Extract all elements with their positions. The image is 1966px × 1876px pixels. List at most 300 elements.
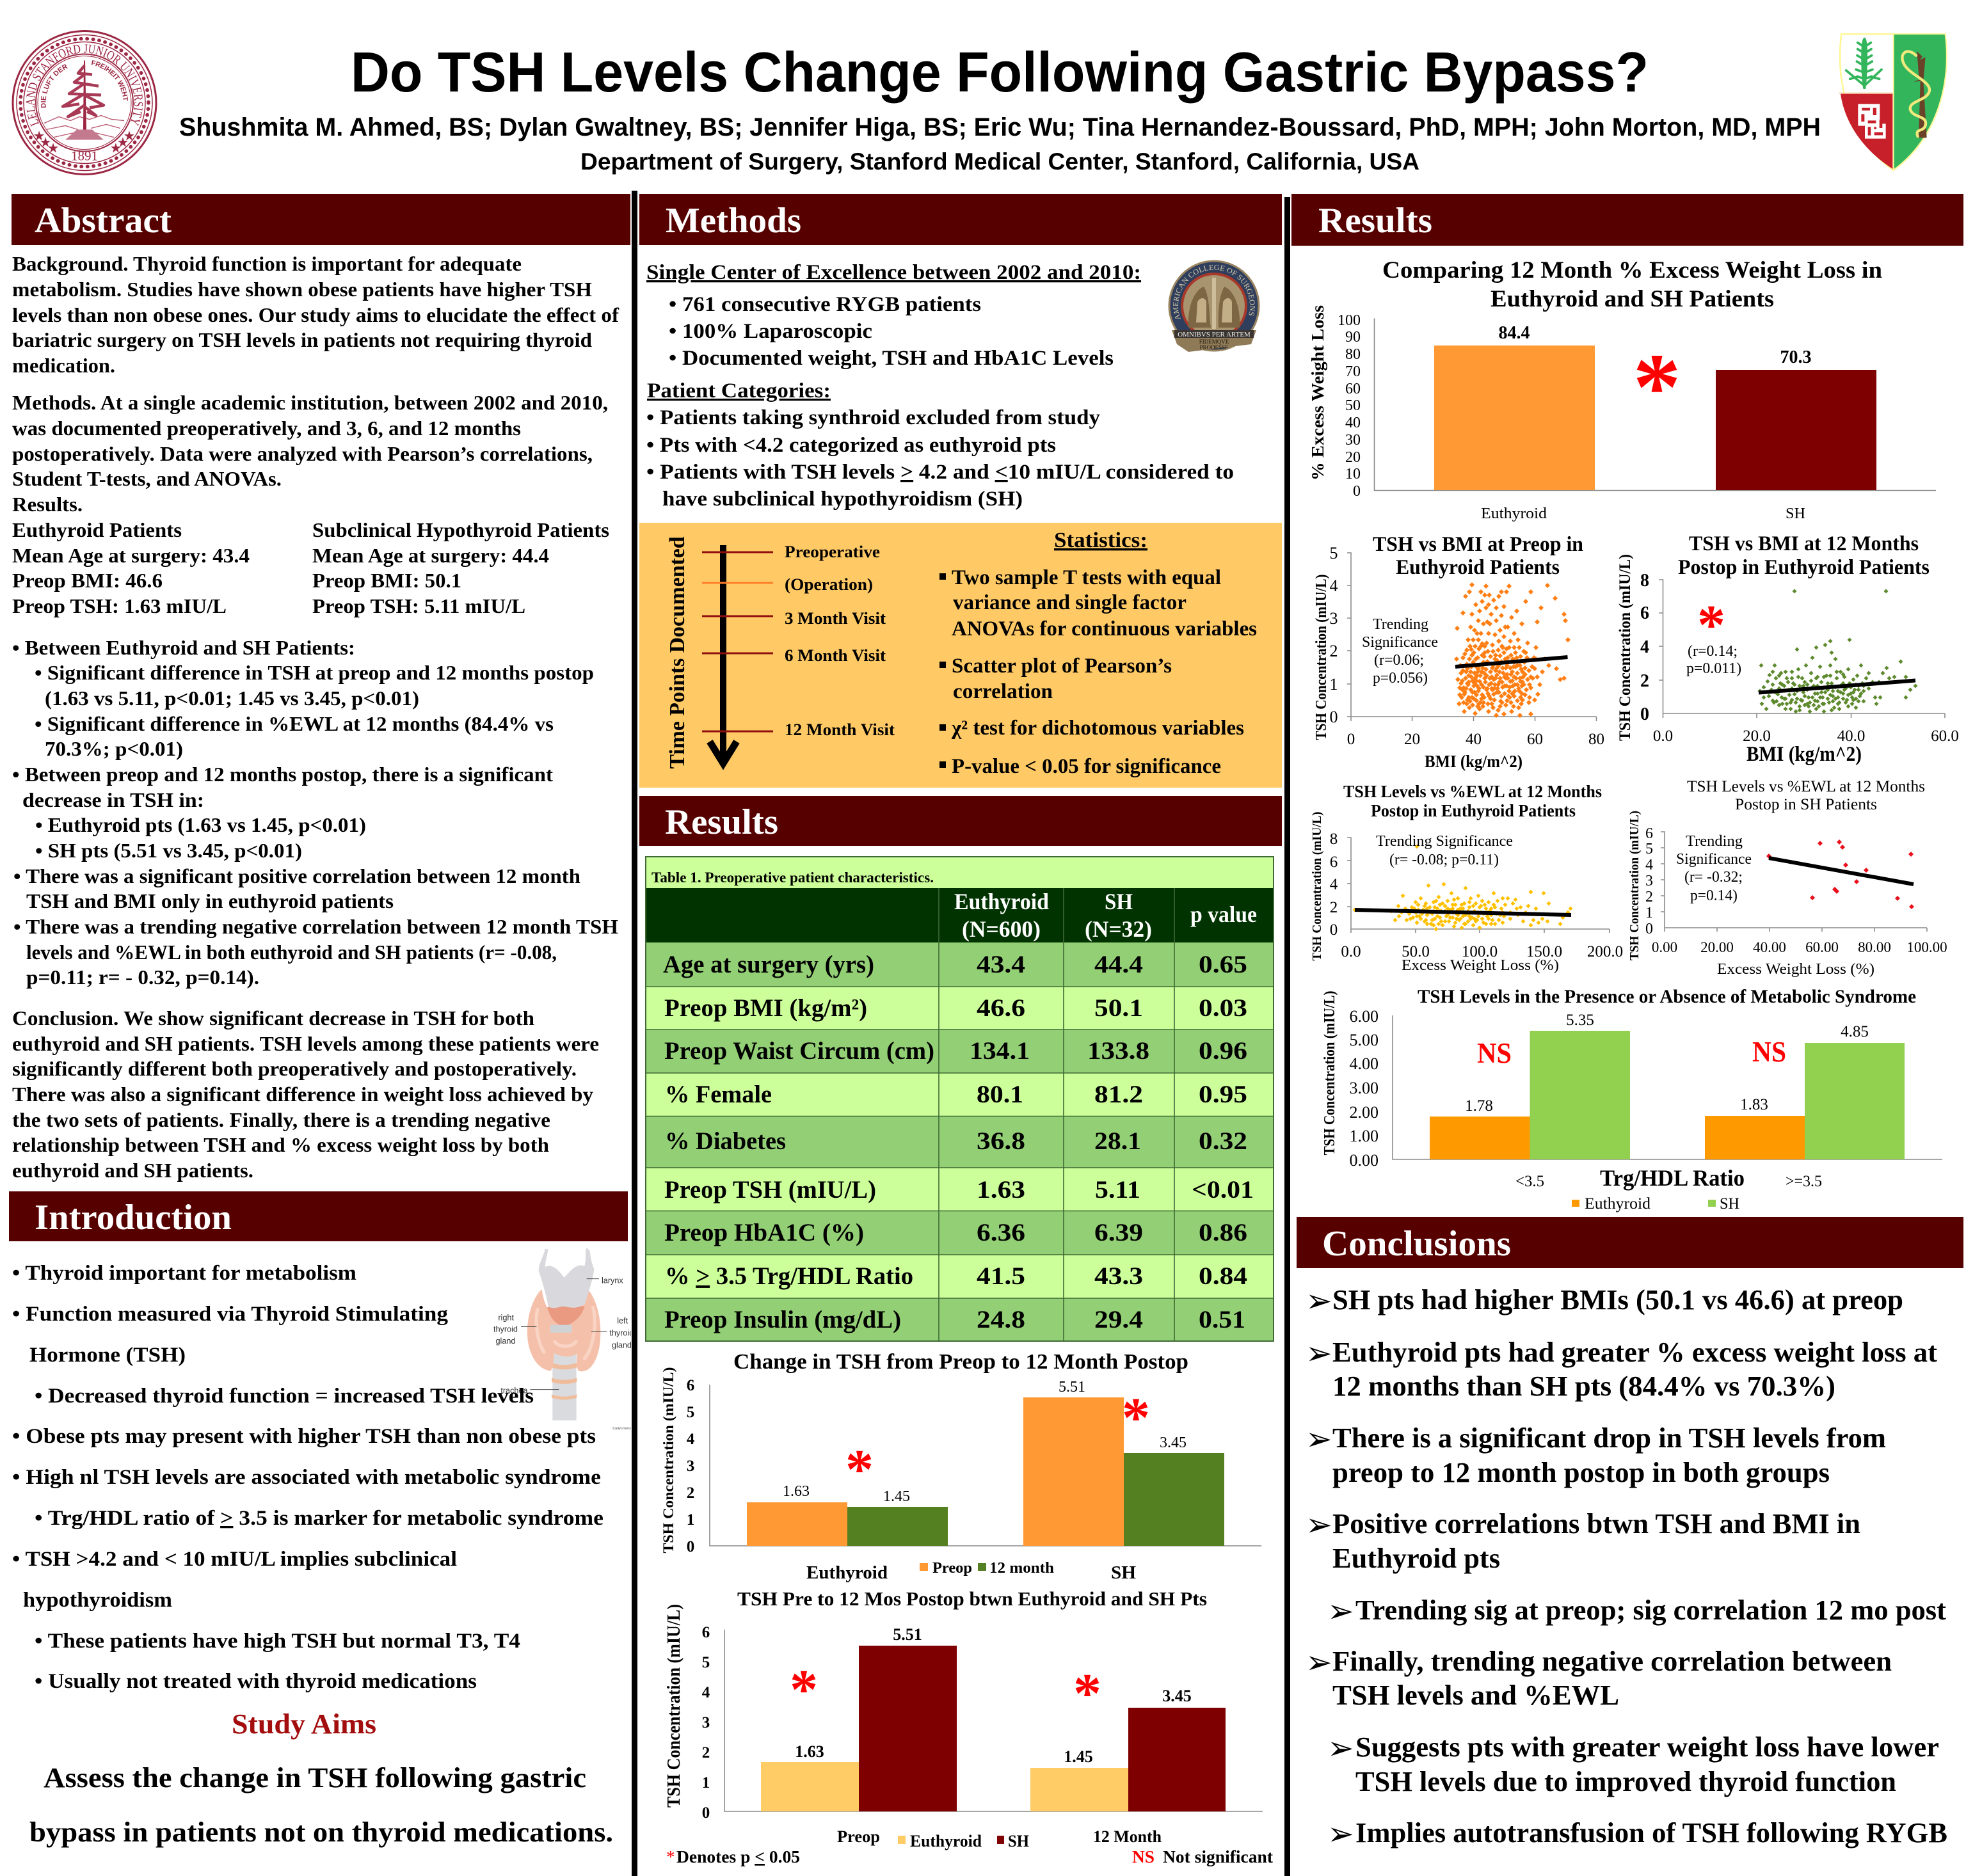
panel: introduction: [9, 1191, 635, 1848]
bar chart: change in TSH from preop to 12 month postop: SH: [1111, 1562, 1136, 1583]
text block: introduction bullets: • Decreased thyroid function = increased TSH levels: [35, 1385, 534, 1408]
text block: conclusion bullets: ➢: [1327, 1815, 1354, 1852]
bar chart: TSH levels by metabolic syndrome: NS: [1477, 1037, 1512, 1069]
text block: patient categories: • Patients with TSH levels > 4.2 and <10 mIU/L considered to: [646, 461, 1234, 484]
bar chart: TSH pre to 12 months postop between euthyroid and SH: 4: [702, 1684, 710, 1701]
text block: abstract conclusion: significantly different both preoperatively and postoperatively.: [12, 1057, 577, 1080]
bar chart: TSH levels by metabolic syndrome: 1.00: [1349, 1127, 1379, 1145]
text block: introduction bullets: • High nl TSH levels are associated with metabolic syndrome: [12, 1466, 601, 1489]
bar chart: TSH levels by metabolic syndrome: TSH Levels in the Presence or Absence of Metabolic Syndrome: [1418, 986, 1916, 1007]
text block: conclusion bullets: ➢: [1306, 1506, 1332, 1543]
scatter plot: TSH vs BMI at 12 months postop in euthyroid patients: 0.0: [1653, 727, 1673, 745]
diagram: time points timeline: [666, 536, 895, 769]
logo: Stanford University seal: ★: [40, 136, 51, 148]
table row labels: % Diabetes: [665, 1127, 786, 1155]
text block: statistics: correlation: [953, 680, 1053, 703]
table row labels: % Female: [665, 1081, 772, 1108]
text block: abstract results: • Significant difference in TSH at preop and 12 months postop: [35, 661, 594, 684]
table values: 0.84: [1199, 1262, 1247, 1290]
table values: 0.96: [1199, 1037, 1247, 1065]
scatter plot: TSH vs percent EWL in SH patients: Excess Weight Loss (%): [1717, 961, 1874, 978]
chart legend: SH: [1008, 1832, 1029, 1850]
bar chart: change in TSH from preop to 12 month postop: [660, 1350, 1261, 1583]
heading: Abstract: Abstract: [35, 201, 172, 241]
text block: statistics: ANOVAs for continuous variables: [952, 617, 1257, 640]
text block: introduction bullets: Hormone (TSH): [29, 1344, 186, 1367]
table values: 29.4: [1094, 1306, 1143, 1333]
scatter plot: TSH vs BMI at 12 months postop in euthyroid patients: p=0.011): [1686, 660, 1741, 677]
text block: study aims statement: [29, 1762, 613, 1848]
heading: Results: [1291, 194, 1963, 246]
scatter plot: TSH vs BMI at preop in euthyroid patients: 20: [1404, 731, 1420, 748]
scatter plot: TSH vs percent EWL in euthyroid patients: 4: [1330, 876, 1338, 893]
text block: abstract methods: Student T-tests, and ANOVAs.: [12, 467, 282, 490]
bar chart: TSH pre to 12 months postop between euthyroid and SH: 0: [702, 1804, 710, 1822]
text block: abstract results: decrease in TSH in:: [22, 788, 204, 811]
table values: 0.86: [1199, 1219, 1247, 1246]
logo: Stanford University seal: ★: [111, 142, 122, 155]
text block: single center: • Documented weight, TSH and HbA1C Levels: [669, 347, 1114, 370]
text block: single center: Single Center of Excellence between 2002 and 2010:: [646, 261, 1141, 284]
icon: American College of Surgeons seal: OMNIBVS PER ARTEM: [1178, 331, 1251, 338]
bar chart: 12 month percent excess weight loss: 30: [1345, 432, 1361, 449]
logo: Stanford University seal: DIE LUFT DER: [41, 64, 68, 107]
scatter plot: TSH vs percent EWL in euthyroid patients: 100.0: [1462, 943, 1498, 960]
bar chart: 12 month percent excess weight loss: Euthyroid: [1481, 505, 1547, 522]
table values: 1.63: [977, 1176, 1025, 1204]
scatter plot: TSH vs BMI at preop in euthyroid patients: p=0.056): [1373, 670, 1428, 687]
scatter plot: TSH vs BMI at 12 months postop in euthyroid patients: 40.0: [1837, 727, 1865, 745]
scatter plot: TSH vs BMI at preop in euthyroid patients: [0, 0, 1604, 771]
table header: Euthyroid: [954, 889, 1049, 914]
bar chart: TSH levels by metabolic syndrome: TSH Concentration (mIU/L): [1322, 990, 1338, 1156]
text block: statistics: χ² test for dichotomous variables: [951, 717, 1244, 740]
title: Do TSH Levels Change Following Gastric Bypass?: [351, 40, 1649, 104]
bar chart: 12 month percent excess weight loss: 20: [1345, 449, 1361, 466]
chart legend: [898, 1832, 1029, 1850]
bar chart: TSH levels by metabolic syndrome: 6.00: [1349, 1007, 1379, 1026]
text block: abstract results: Preop TSH: 1.63 mIU/L: [12, 594, 227, 617]
bar chart: TSH levels by metabolic syndrome: 1.83: [1740, 1096, 1768, 1113]
scatter plot: TSH vs percent EWL in euthyroid patients: TSH Concentration (mIU/L): [1310, 811, 1324, 961]
bar chart: 12 month percent excess weight loss: 70.3: [1780, 347, 1811, 367]
scatter plot: TSH vs BMI at 12 months postop in euthyroid patients: 6: [1640, 603, 1649, 623]
scatter plot: TSH vs BMI at 12 months postop in euthyroid patients: Postop in Euthyroid Patients: [1678, 556, 1930, 579]
bar chart: TSH pre to 12 months postop between euthyroid and SH: 12 Month: [1093, 1827, 1162, 1846]
icon: thyroid gland anatomy illustration: thyroid: [493, 1325, 518, 1334]
bar chart: TSH levels by metabolic syndrome: Trg/HDL Ratio: [1600, 1165, 1745, 1191]
scatter plot: TSH vs percent EWL in SH patients: Trending: [1686, 833, 1743, 850]
icon: thyroid gland anatomy illustration: left: [617, 1316, 628, 1325]
panel: results, right column charts: [0, 0, 1963, 1212]
bar chart: TSH levels by metabolic syndrome: >=3.5: [1786, 1173, 1822, 1190]
scatter plot: TSH vs BMI at 12 months postop in euthyroid patients: BMI (kg/m^2): [1746, 743, 1862, 766]
text block: abstract conclusion: [12, 1006, 599, 1182]
footnote: significance key: [666, 1847, 1273, 1866]
text block: abstract background: medication.: [12, 354, 115, 377]
text block: abstract background: [12, 252, 619, 377]
table values: 43.3: [1094, 1262, 1143, 1290]
text block: conclusion bullets: Suggests pts with greater weight loss have lower: [1355, 1731, 1939, 1763]
scatter plot: TSH vs percent EWL in SH patients: 0: [1645, 921, 1653, 937]
text block: study aims statement: Assess the change in TSH following gastric: [44, 1762, 586, 1793]
bar chart: TSH pre to 12 months postop between euthyroid and SH: 2: [702, 1744, 710, 1761]
header: [12, 30, 1947, 175]
table values: 44.4: [1094, 951, 1143, 978]
table values: 6.36: [977, 1219, 1025, 1246]
bar chart: TSH pre to 12 months postop between euthyroid and SH: *: [790, 1659, 818, 1721]
text block: single center: [646, 261, 1141, 370]
text block: abstract conclusion: euthyroid and SH patients. TSH levels among these patients were: [12, 1032, 599, 1055]
text block: abstract background: Background. Thyroid function is important for adequate: [12, 252, 522, 275]
text block: introduction bullets: • These patients have high TSH but normal T3, T4: [35, 1630, 520, 1653]
text block: abstract results: Preop TSH: 5.11 mIU/L: [312, 594, 525, 617]
table values: 0.95: [1199, 1081, 1247, 1108]
scatter plot: TSH vs percent EWL in euthyroid patients: TSH Levels vs %EWL at 12 Months: [1343, 782, 1602, 801]
icon: thyroid gland anatomy illustration: larynx: [602, 1276, 623, 1285]
scatter plot: TSH vs BMI at preop in euthyroid patients: 80: [1588, 731, 1604, 748]
text block: introduction bullets: [12, 1262, 603, 1693]
text block: single center: • 100% Laparoscopic: [669, 320, 872, 343]
bar chart: change in TSH from preop to 12 month postop: 5.51: [1059, 1379, 1085, 1395]
logo: Stanford University seal: 1891: [71, 148, 98, 164]
scatter plot: TSH vs BMI at preop in euthyroid patients: 1: [1330, 675, 1338, 694]
footnote: significance key: *: [666, 1847, 675, 1866]
chart legend: 12 month: [989, 1560, 1054, 1577]
bar chart: TSH pre to 12 months postop between euthyroid and SH: 3: [702, 1714, 710, 1731]
department: Department of Surgery, Stanford Medical Center, Stanford, California, USA: [580, 148, 1419, 175]
text block: statistics: Statistics:: [1054, 529, 1147, 552]
bar chart: change in TSH from preop to 12 month postop: 1: [687, 1511, 694, 1529]
bar chart: change in TSH from preop to 12 month postop: 2: [687, 1484, 694, 1502]
text block: abstract results: • There was a trending negative correlation between 12 month TSH: [13, 915, 618, 938]
text block: conclusion bullets: preop to 12 month postop in both groups: [1332, 1457, 1830, 1488]
text block: abstract background: levels than non obese ones. Our study aims to elucidate the effect of: [12, 303, 619, 326]
scatter plot: TSH vs percent EWL in SH patients: 3: [1645, 873, 1653, 889]
bar chart: TSH levels by metabolic syndrome: 5.35: [1566, 1012, 1594, 1029]
text block: abstract background: metabolism. Studies have shown obese patients have higher TSH: [12, 278, 592, 301]
text block: patient categories: Patient Categories:: [647, 379, 831, 402]
scatter plot: TSH vs BMI at preop in euthyroid patients: 40: [1466, 731, 1482, 748]
logo: Stanford University seal: FREIHEIT WEHT: [91, 60, 128, 101]
table values: 43.4: [977, 951, 1025, 978]
text block: study aims statement: bypass in patients not on thyroid medications.: [29, 1816, 613, 1848]
panel: abstract: [12, 194, 630, 1182]
bar chart: change in TSH from preop to 12 month postop: 3.45: [1160, 1435, 1187, 1451]
icon: thyroid gland anatomy illustration: gland: [496, 1337, 515, 1346]
scatter plot: TSH vs percent EWL in euthyroid patients: 0.0: [1341, 943, 1361, 960]
icon: American College of Surgeons seal: PRODESSE: [1199, 344, 1229, 351]
bar chart: TSH pre to 12 months postop between euthyroid and SH: *: [1073, 1663, 1101, 1725]
scatter plot: TSH vs percent EWL in SH patients: 80.00: [1858, 939, 1891, 955]
bar chart: 12 month percent excess weight loss: 100: [1338, 312, 1361, 329]
table values: 36.8: [977, 1127, 1025, 1155]
scatter plot: TSH vs percent EWL in SH patients: 0.00: [1652, 939, 1677, 955]
scatter plot: TSH vs percent EWL in euthyroid patients: 0: [1330, 921, 1338, 939]
bar chart: change in TSH from preop to 12 month postop: 1.63: [783, 1483, 810, 1500]
bar chart: TSH pre to 12 months postop between euthyroid and SH: 1.63: [795, 1742, 824, 1761]
scatter plot: TSH vs percent EWL in euthyroid patients: Postop in Euthyroid Patients: [1371, 801, 1576, 820]
text block: conclusion bullets: TSH levels due to improved thyroid function: [1355, 1766, 1896, 1797]
authors: Shushmita M. Ahmed, BS; Dylan Gwaltney, BS; Jennifer Higa, BS; Eric Wu; Tina Hernandez-Boussard, PhD, MPH; John Morton, MD, MPH: [179, 113, 1821, 141]
text block: abstract results: • Euthyroid pts (1.63 vs 1.45, p<0.01): [35, 813, 366, 836]
scatter plot: TSH vs percent EWL in SH patients: p=0.14): [1690, 887, 1738, 904]
heading: Results: Results: [665, 802, 778, 842]
table header: [954, 889, 1257, 942]
text block: conclusion bullets: ➢: [1306, 1420, 1332, 1458]
scatter plot: TSH vs BMI at 12 months postop in euthyroid patients: *: [1697, 594, 1725, 656]
text block: abstract results: • Between preop and 12 months postop, there is a significant: [12, 763, 553, 786]
bar chart: 12 month percent excess weight loss: Comparing 12 Month % Excess Weight Loss in: [1382, 257, 1882, 283]
text block: conclusion bullets: Euthyroid pts: [1332, 1543, 1500, 1574]
scatter plot: TSH vs BMI at preop in euthyroid patients: Significance: [1362, 634, 1438, 651]
bar chart: change in TSH from preop to 12 month postop: *: [1122, 1387, 1150, 1449]
bar chart: 12 month percent excess weight loss: 10: [1345, 466, 1361, 482]
heading: Conclusions: Conclusions: [1322, 1224, 1511, 1264]
table values: 5.11: [1095, 1176, 1140, 1204]
chart legend: SH: [1720, 1195, 1739, 1212]
table values: <0.01: [1192, 1176, 1254, 1204]
text block: abstract conclusion: Conclusion. We show significant decrease in TSH for both: [12, 1006, 534, 1029]
text block: conclusion bullets: Finally, trending negative correlation between: [1332, 1646, 1892, 1677]
text block: conclusion bullets: Positive correlations btwn TSH and BMI in: [1332, 1508, 1860, 1539]
logo: Stanford Medicine shield: [1839, 34, 1947, 170]
bar chart: TSH pre to 12 months postop between euthyroid and SH: 6: [702, 1624, 710, 1641]
text block: abstract methods: [12, 391, 608, 490]
bar chart: TSH pre to 12 months postop between euthyroid and SH: 5.51: [893, 1625, 922, 1644]
text block: abstract results: Preop BMI: 50.1: [312, 569, 461, 592]
text block: abstract results: • Significant difference in %EWL at 12 months (84.4% vs: [35, 712, 554, 735]
bar chart: TSH levels by metabolic syndrome: 3.00: [1349, 1079, 1379, 1097]
table row labels: [663, 951, 934, 1333]
text block: introduction bullets: • Obese pts may present with higher TSH than non obese pts: [12, 1425, 596, 1448]
text block: abstract conclusion: There was also a significant difference in weight loss achieved by: [12, 1083, 593, 1106]
footnote: significance key: Not significant: [1163, 1847, 1273, 1866]
text block: conclusion bullets: 12 months than SH pts (84.4% vs 70.3%): [1332, 1371, 1835, 1402]
bar chart: TSH levels by metabolic syndrome: NS: [1752, 1036, 1786, 1068]
scatter plot: TSH vs percent EWL in SH patients: 4: [1645, 857, 1653, 873]
scatter plot: TSH vs percent EWL in SH patients: 60.00: [1805, 939, 1839, 955]
text block: abstract results: Preop BMI: 46.6: [12, 569, 163, 592]
scatter plot: TSH vs BMI at 12 months postop in euthyroid patients: 4: [1640, 637, 1649, 657]
scatter plot: TSH vs BMI at 12 months postop in euthyroid patients: TSH Concentration (mIU/L): [1617, 554, 1634, 741]
bar chart: change in TSH from preop to 12 month postop: TSH Concentration (mIU/L): [660, 1367, 676, 1554]
table row labels: Age at surgery (yrs): [663, 951, 874, 978]
scatter plot: TSH vs BMI at preop in euthyroid patients: TSH Concentration (mIU/L): [1313, 575, 1330, 740]
bar chart: TSH pre to 12 months postop between euthyroid and SH: 1.45: [1064, 1747, 1093, 1766]
scatter plot: TSH vs BMI at 12 months postop in euthyroid patients: 20.0: [1743, 727, 1771, 745]
scatter plot: TSH vs percent EWL in SH patients: (r= -0.32;: [1684, 869, 1743, 886]
panel: time points and statistics: [639, 523, 1282, 788]
scatter plot: TSH vs percent EWL in SH patients: 5: [1645, 841, 1653, 857]
table values: 0.51: [1199, 1306, 1245, 1333]
table values: 24.8: [977, 1306, 1025, 1333]
icon: thyroid gland anatomy illustration: [493, 1248, 635, 1431]
text block: abstract results: TSH and BMI only in euthyroid patients: [26, 889, 394, 912]
table values: 50.1: [1094, 994, 1143, 1022]
text block: conclusion bullets: Trending sig at preop; sig correlation 12 mo post: [1355, 1594, 1946, 1626]
scatter plot: TSH vs BMI at preop in euthyroid patients: TSH vs BMI at Preop in: [1373, 533, 1583, 556]
table header: p value: [1190, 902, 1257, 927]
logo: Stanford University seal: ★: [34, 129, 45, 142]
table values: 41.5: [977, 1262, 1025, 1290]
diagram: time points timeline: 12 Month Visit: [785, 720, 895, 739]
text block: abstract results: levels and %EWL in both euthyroid and SH patients (r= -0.08,: [26, 941, 557, 964]
diagram: time points timeline: (Operation): [785, 575, 873, 594]
bar chart: TSH levels by metabolic syndrome: [1322, 986, 1942, 1212]
scatter plot: TSH vs BMI at 12 months postop in euthyroid patients: [0, 0, 1959, 766]
text block: single center: • 761 consecutive RYGB patients: [669, 293, 981, 316]
text block: abstract conclusion: the two sets of patients. Finally, there is a trending negative: [12, 1108, 550, 1131]
diagram: time points timeline: 6 Month Visit: [785, 646, 886, 665]
scatter plot: TSH vs BMI at preop in euthyroid patients: Trending: [1373, 616, 1428, 633]
heading: Introduction: Introduction: [35, 1198, 232, 1237]
text block: abstract results: Results.: [12, 493, 83, 516]
heading: Methods: Methods: [666, 201, 801, 241]
bar chart: 12 month percent excess weight loss: 84.4: [1499, 323, 1530, 343]
bar chart: TSH pre to 12 months postop between euthyroid and SH: Preop: [837, 1827, 880, 1846]
text block: abstract results: Subclinical Hypothyroid Patients: [312, 518, 609, 541]
icon: thyroid gland anatomy illustration: trachea: [500, 1387, 529, 1395]
text block: abstract results: (1.63 vs 5.11, p<0.01; 1.45 vs 3.45, p<0.01): [45, 687, 419, 710]
logo: Stanford University seal: LELAND STANFORD JUNIOR UNIVERSITY: [26, 45, 143, 127]
table values: 0.03: [1199, 994, 1247, 1022]
text block: introduction bullets: • Thyroid important for metabolism: [12, 1262, 356, 1285]
text block: abstract results: Mean Age at surgery: 44.4: [312, 544, 549, 567]
text block: conclusion bullets: ➢: [1327, 1729, 1354, 1767]
text block: abstract methods: postoperatively. Data were analyzed with Pearson’s correlations,: [12, 442, 593, 465]
text block: statistics: Two sample T tests with equal: [952, 566, 1221, 589]
table values: [970, 951, 1254, 1333]
text block: abstract results: [12, 493, 618, 989]
icon: American College of Surgeons seal: AMERICAN COLLEGE OF SURGEONS: [1173, 265, 1255, 319]
scatter plot: TSH vs percent EWL in euthyroid patients: 8: [1330, 831, 1338, 848]
table values: 0.32: [1199, 1127, 1247, 1155]
scatter plot: TSH vs percent EWL in euthyroid patients: 2: [1330, 899, 1338, 916]
text block: abstract background: bariatric surgery on TSH levels in patients not requiring thyroid: [12, 328, 592, 351]
text block: statistics: P-value < 0.05 for significance: [952, 755, 1221, 778]
heading: Study Aims: Study Aims: [232, 1708, 376, 1740]
scatter plot: TSH vs percent EWL in SH patients: 40.00: [1753, 939, 1786, 955]
bar chart: 12 month percent excess weight loss: 40: [1345, 415, 1361, 431]
footnote: significance key: NS: [1132, 1847, 1155, 1866]
table: preoperative patient characteristics: [646, 857, 1274, 1341]
text block: conclusion bullets: ➢: [1306, 1644, 1332, 1681]
scatter plot: TSH vs BMI at 12 months postop in euthyroid patients: 60.0: [1931, 727, 1959, 745]
footnote: significance key: Denotes p < 0.05: [676, 1847, 800, 1866]
scatter plot: TSH vs BMI at preop in euthyroid patients: 3: [1330, 609, 1338, 628]
scatter plot: TSH vs BMI at 12 months postop in euthyroid patients: 0: [1640, 704, 1649, 724]
text block: abstract results: Euthyroid Patients: [12, 518, 182, 541]
text block: statistics: [939, 529, 1257, 778]
bar chart: TSH pre to 12 months postop between euthyroid and SH: [664, 1587, 1263, 1850]
bar chart: 12 month percent excess weight loss: [1308, 257, 1936, 522]
scatter plot: TSH vs BMI at 12 months postop in euthyroid patients: 8: [1640, 571, 1649, 591]
scatter plot: TSH vs percent EWL in euthyroid patients: 150.0: [1526, 943, 1562, 960]
diagram: time points timeline: 3 Month Visit: [785, 609, 886, 628]
scatter plot: TSH vs percent EWL in euthyroid patients: 200.0: [1587, 943, 1623, 960]
bar chart: change in TSH from preop to 12 month postop: 4: [687, 1431, 695, 1448]
bar chart: 12 month percent excess weight loss: % Excess Weight Loss: [1308, 305, 1327, 481]
scatter plot: TSH vs BMI at 12 months postop in euthyroid patients: 2: [1640, 671, 1649, 691]
bar chart: change in TSH from preop to 12 month postop: 3: [687, 1458, 694, 1475]
bar chart: 12 month percent excess weight loss: 80: [1345, 346, 1361, 363]
table row labels: Preop Waist Circum (cm): [664, 1037, 934, 1065]
bar chart: TSH levels by metabolic syndrome: 4.00: [1349, 1054, 1379, 1073]
text block: conclusion bullets: TSH levels and %EWL: [1332, 1680, 1619, 1711]
text block: statistics: variance and single factor: [953, 591, 1187, 614]
scatter plot: TSH vs BMI at preop in euthyroid patients: 4: [1330, 576, 1338, 595]
bar chart: change in TSH from preop to 12 month postop: 6: [687, 1377, 694, 1394]
table row labels: Preop HbA1C (%): [664, 1219, 864, 1246]
bar chart: TSH pre to 12 months postop between euthyroid and SH: 5: [702, 1654, 710, 1671]
heading: Results: [639, 796, 1282, 846]
scatter plot: TSH vs BMI at preop in euthyroid patients: 0: [1330, 708, 1338, 726]
bar chart: TSH levels by metabolic syndrome: <3.5: [1515, 1173, 1544, 1190]
text block: conclusion bullets: ➢: [1327, 1593, 1354, 1630]
scatter plot: TSH vs BMI at preop in euthyroid patients: 2: [1330, 642, 1338, 660]
bar chart: TSH levels by metabolic syndrome: 1.78: [1465, 1097, 1493, 1115]
table values: 6.39: [1094, 1219, 1143, 1246]
text block: patient categories: [646, 379, 1234, 511]
bar chart: 12 month percent excess weight loss: 50: [1345, 397, 1361, 414]
panel: methods: [639, 194, 1282, 788]
table header: (N=32): [1085, 916, 1152, 942]
bar chart: 12 month percent excess weight loss: 0: [1353, 483, 1361, 500]
scatter plot: TSH vs percent EWL in SH patients: [0, 0, 1947, 978]
scatter plot: TSH vs BMI at 12 months postop in euthyroid patients: TSH vs BMI at 12 Months: [1689, 532, 1919, 555]
table values: 46.6: [977, 994, 1025, 1022]
bar chart: TSH pre to 12 months postop between euthyroid and SH: TSH Concentration (mIU/L): [664, 1604, 684, 1808]
text block: abstract results: • SH pts (5.51 vs 3.45, p<0.01): [35, 839, 302, 862]
text block: statistics: Scatter plot of Pearson’s: [952, 655, 1172, 678]
text block: abstract methods: was documented preoperatively, and 3, 6, and 12 months: [12, 417, 521, 440]
bar chart: 12 month percent excess weight loss: Euthyroid and SH Patients: [1490, 286, 1774, 312]
bar chart: 12 month percent excess weight loss: 60: [1345, 381, 1361, 397]
heading: Abstract: [12, 194, 630, 245]
scatter plot: TSH vs percent EWL in euthyroid patients: Excess Weight Loss (%): [1402, 957, 1559, 974]
text block: introduction bullets: • TSH >4.2 and < 10 mIU/L implies subclinical: [12, 1548, 457, 1571]
bar chart: TSH pre to 12 months postop between euthyroid and SH: TSH Pre to 12 Mos Postop btwn Euthyroid and SH Pts: [737, 1587, 1207, 1610]
text block: abstract conclusion: euthyroid and SH patients.: [12, 1159, 253, 1182]
icon: thyroid gland anatomy illustration: thyroid: [609, 1328, 634, 1337]
text block: introduction bullets: • Trg/HDL ratio of > 3.5 is marker for metabolic syndrome: [35, 1507, 603, 1530]
bar chart: TSH levels by metabolic syndrome: 0.00: [1349, 1151, 1379, 1170]
chart legend: Euthyroid: [1585, 1195, 1651, 1212]
scatter plot: TSH vs percent EWL in euthyroid patients: 50.0: [1402, 943, 1430, 960]
text block: conclusion bullets: Euthyroid pts had greater % excess weight loss at: [1332, 1337, 1937, 1368]
text block: conclusion bullets: SH pts had higher BMIs (50.1 vs 46.6) at preop: [1332, 1284, 1903, 1316]
table values: 80.1: [977, 1081, 1023, 1108]
chart legend: [1572, 1195, 1739, 1212]
table row labels: % > 3.5 Trg/HDL Ratio: [665, 1262, 913, 1290]
diagram: time points timeline: Time Points Documented: [666, 536, 689, 769]
heading: Conclusions: [1297, 1217, 1963, 1268]
scatter plot: TSH vs percent EWL in SH patients: Significance: [1676, 851, 1752, 868]
text block: abstract methods: Methods. At a single academic institution, between 2002 and 2010,: [12, 391, 608, 414]
icon: thyroid gland anatomy illustration: Carlyn Iverson: [612, 1427, 635, 1431]
scatter plot: TSH vs BMI at 12 months postop in euthyroid patients: (r=0.14;: [1688, 643, 1738, 660]
scatter plot: TSH vs BMI at preop in euthyroid patients: 60: [1527, 731, 1543, 748]
scatter plot: TSH vs percent EWL in SH patients: Postop in SH Patients: [1735, 796, 1877, 813]
scatter plot: TSH vs percent EWL in euthyroid patients: Trending Significance: [1376, 833, 1513, 850]
table row labels: Preop TSH (mIU/L): [664, 1176, 876, 1204]
scatter plot: TSH vs percent EWL in SH patients: 1: [1645, 905, 1653, 921]
bar chart: 12 month percent excess weight loss: *: [1633, 334, 1681, 440]
text block: conclusion bullets: [1306, 1282, 1947, 1852]
bar chart: change in TSH from preop to 12 month postop: Change in TSH from Preop to 12 Month Postop: [733, 1350, 1188, 1374]
panel: results, table and TSH bar charts: [639, 796, 1282, 1866]
